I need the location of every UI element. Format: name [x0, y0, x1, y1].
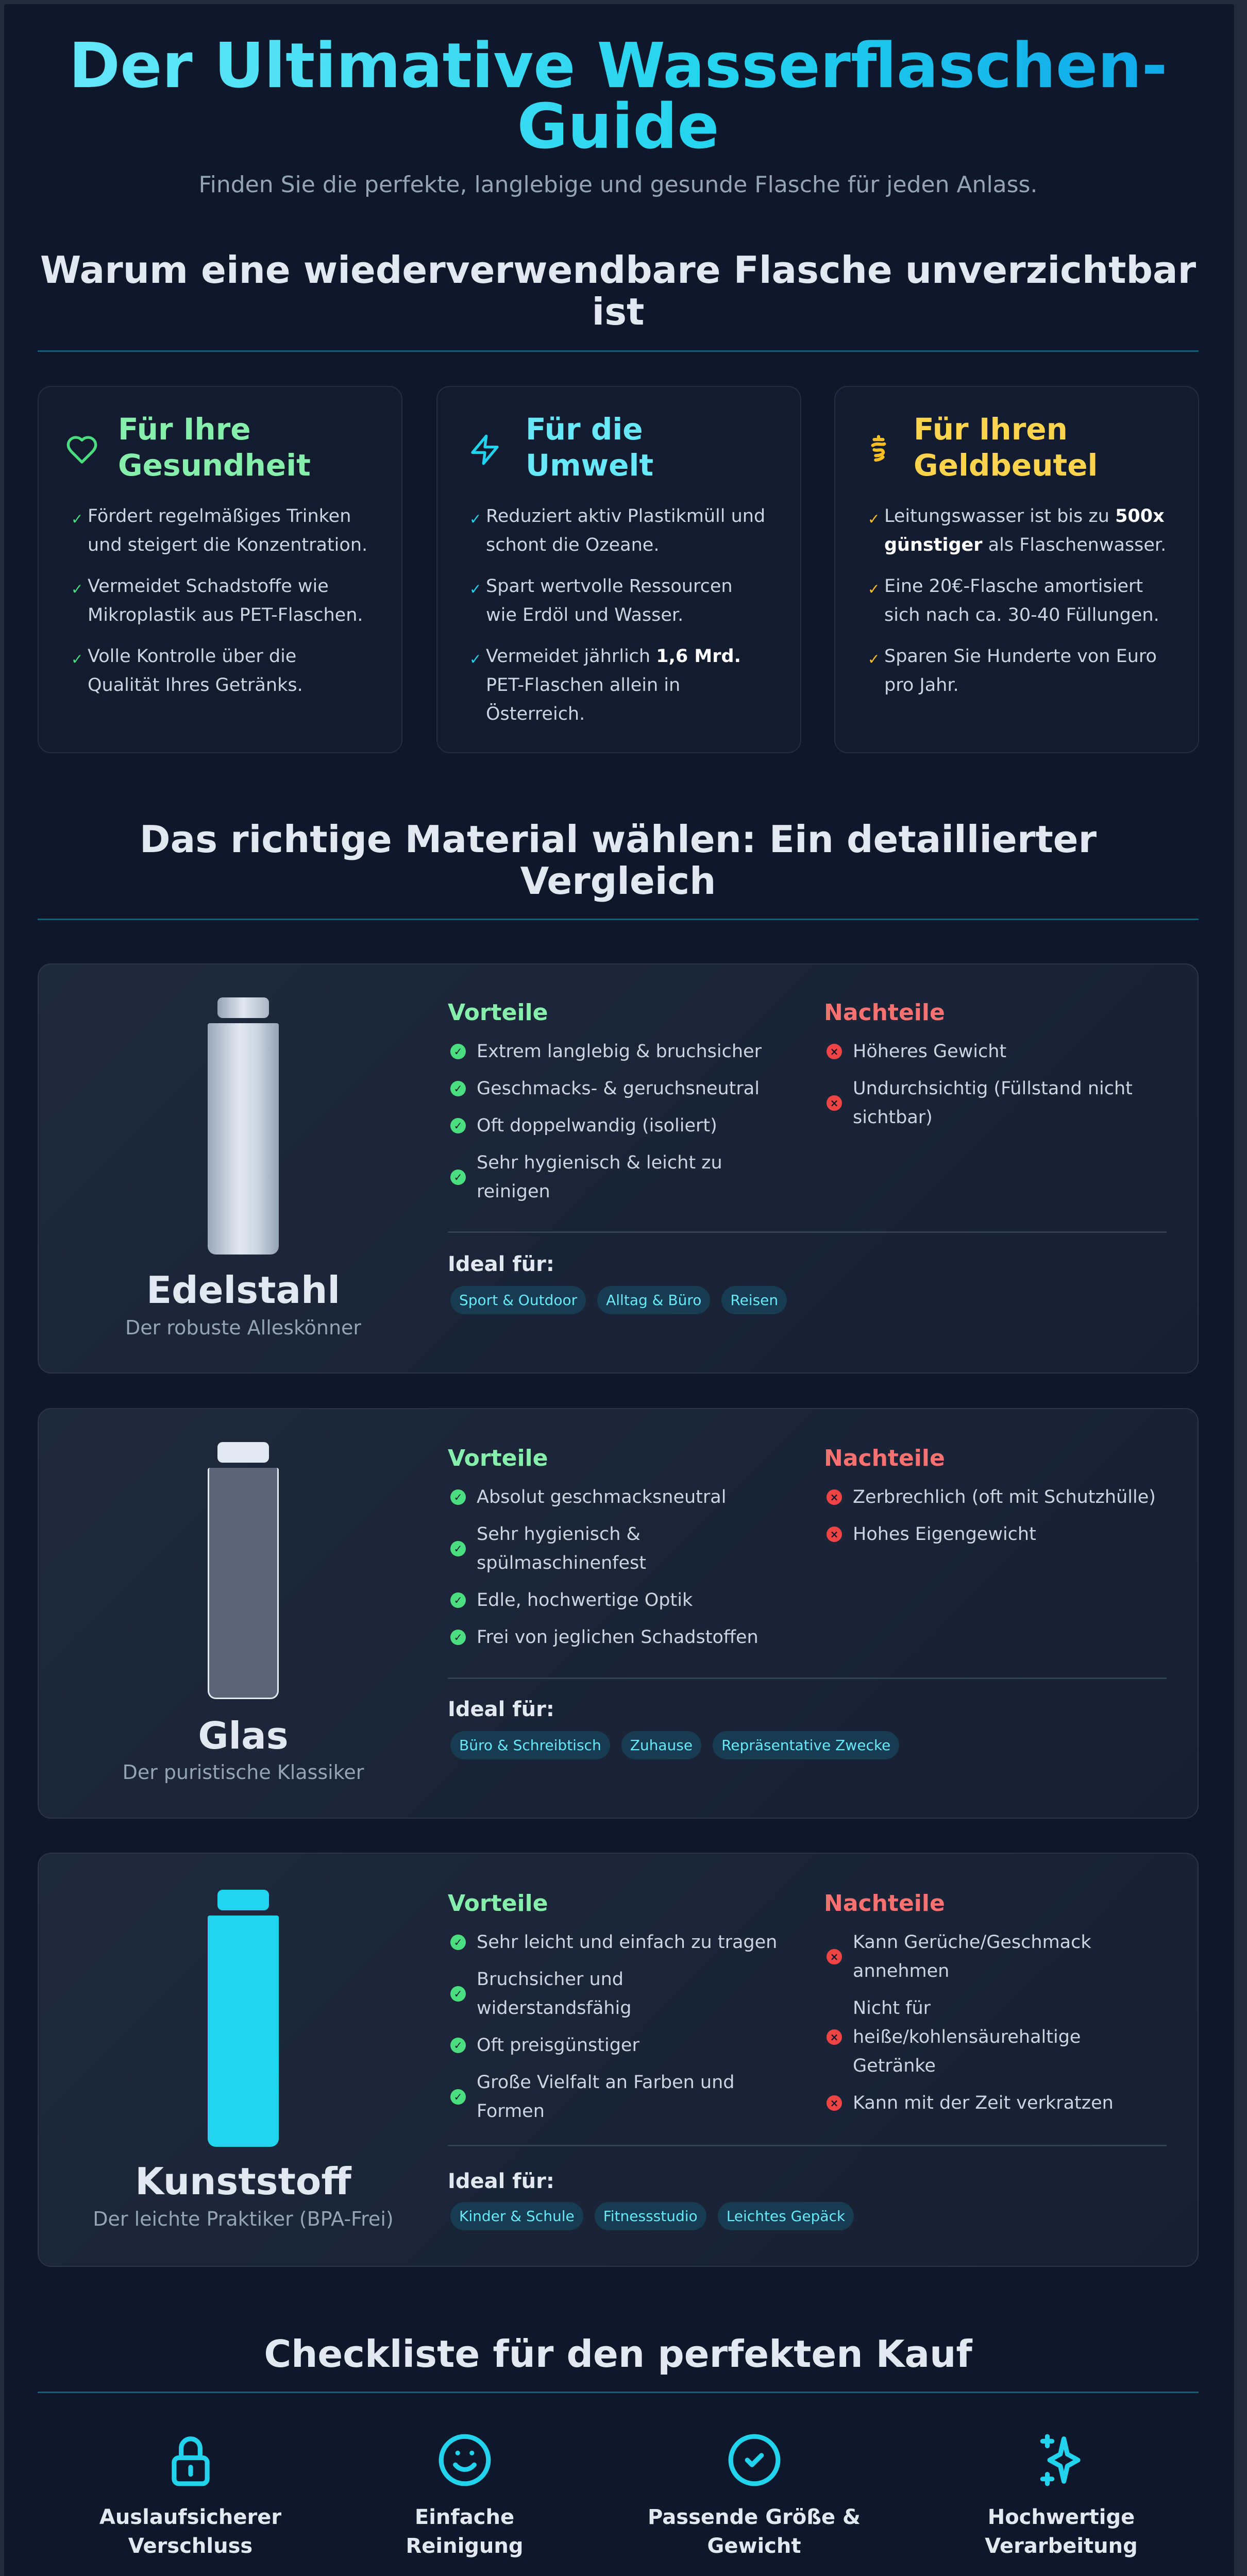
pros: reinigen	[477, 1181, 550, 1202]
list: pro Jahr.	[884, 675, 959, 696]
pros: Extrem langlebig & bruchsicher	[477, 1041, 762, 1062]
checklist item: smile: Einfache	[415, 2505, 514, 2529]
pros: ✓	[454, 1631, 462, 1643]
pros: Vorteile	[448, 1445, 548, 1471]
pros: ✓	[454, 1594, 462, 1606]
list: Eine 20€-Flasche amortisiert	[884, 576, 1143, 597]
pros: ✓	[454, 1988, 462, 2000]
pros: Frei von jeglichen Schadstoffen	[477, 1627, 759, 1648]
tags: Zuhause	[630, 1737, 693, 1754]
cons: Nachteile	[824, 999, 945, 1026]
list: Mikroplastik aus PET-Flaschen.	[88, 605, 363, 625]
pros	[448, 1890, 777, 2122]
subtitle: Finden Sie die perfekte, langlebige und gesunde Flasche für jeden Anlass.	[199, 172, 1037, 198]
pros: Oft preisgünstiger	[477, 2035, 639, 2056]
cons	[824, 1890, 1114, 2113]
checklist item: sparkles	[916, 2432, 1206, 2561]
heading	[118, 412, 311, 483]
panel: environment: ✓	[469, 511, 481, 528]
panel: wallet	[834, 386, 1199, 753]
panel: health	[38, 386, 402, 753]
cons: ×	[830, 1951, 838, 1963]
ideal for: Ideal für:	[448, 2170, 554, 2193]
tags: Repräsentative Zwecke	[721, 1737, 890, 1754]
pros: ✓	[454, 1491, 462, 1503]
pros: ✓	[454, 1936, 462, 1948]
bottle: glass	[123, 1442, 364, 1784]
list: günstiger als Flaschenwasser.	[884, 535, 1166, 555]
cons: Höheres Gewicht	[853, 1041, 1006, 1062]
tagline: Der puristische Klassiker	[123, 1761, 364, 1784]
heading	[526, 412, 653, 483]
list: Österreich.	[486, 704, 585, 724]
panel: environment	[436, 386, 801, 753]
heading: Für die	[526, 412, 643, 447]
pros: Formen	[477, 2101, 545, 2122]
pros: Vorteile	[448, 999, 548, 1026]
list: und steigert die Konzentration.	[88, 535, 367, 555]
cons: ×	[830, 1491, 838, 1503]
panel: wallet: ✓	[868, 651, 880, 668]
cons	[824, 1445, 1156, 1545]
heading: Gesundheit	[118, 448, 311, 483]
heading: material: Das richtige Material wählen: Ein detaillierter	[140, 818, 1097, 861]
heading: Umwelt	[526, 448, 653, 483]
tags: Leichtes Gepäck	[727, 2208, 845, 2225]
heading: material: Vergleich	[520, 859, 716, 903]
heading: Für Ihren	[914, 412, 1068, 447]
cons: annehmen	[853, 1961, 949, 1981]
heading: why reusable	[40, 248, 1196, 333]
panel: Glas	[38, 1408, 1199, 1819]
heading: why reusable: Warum eine wiederverwendbare Flasche unverzichtbar	[40, 248, 1196, 292]
cons: Nachteile	[824, 1445, 945, 1471]
list: Reduziert aktiv Plastikmüll und	[486, 506, 765, 527]
panel: environment: ✓	[469, 581, 481, 598]
cons: ×	[830, 1097, 838, 1109]
list: Spart wertvolle Ressourcen	[486, 576, 733, 597]
heading: why reusable: ist	[592, 290, 644, 333]
cons: ×	[830, 1528, 838, 1540]
icon: heart	[67, 436, 97, 464]
heading: Für Ihre	[118, 412, 251, 447]
cons: ×	[830, 2097, 838, 2109]
cons: Hohes Eigengewicht	[853, 1524, 1036, 1545]
tags	[450, 1731, 899, 1759]
pros: Sehr hygienisch &	[477, 1524, 641, 1545]
icon: money	[871, 435, 886, 462]
cons: Undurchsichtig (Füllstand nicht	[853, 1078, 1133, 1099]
tags	[450, 1286, 787, 1314]
icon: lightning	[471, 435, 499, 465]
cons: Nicht für	[853, 1998, 931, 2019]
list: sich nach ca. 30-40 Füllungen.	[884, 605, 1159, 625]
tags: Kinder & Schule	[459, 2208, 575, 2225]
pros: ✓	[454, 1171, 462, 1183]
checklist item: check circle: Passende Größe &	[648, 2505, 861, 2529]
panel: health: ✓	[71, 581, 83, 598]
cons: Zerbrechlich (oft mit Schutzhülle)	[853, 1487, 1156, 1507]
title: Guide	[517, 91, 719, 163]
list	[868, 506, 1166, 696]
tags: Reisen	[730, 1292, 778, 1309]
pros: Sehr leicht und einfach zu tragen	[477, 1932, 777, 1953]
pros	[448, 999, 762, 1202]
list: Volle Kontrolle über die	[88, 646, 296, 667]
pros: Sehr hygienisch & leicht zu	[477, 1153, 722, 1173]
cons: heiße/kohlensäurehaltige	[853, 2027, 1081, 2047]
cons: ×	[830, 2031, 838, 2043]
checklist item: sparkles: Hochwertige	[988, 2505, 1135, 2529]
list	[469, 506, 765, 724]
checklist item: smile	[319, 2432, 610, 2561]
pros: ✓	[454, 2039, 462, 2052]
panel: health: ✓	[71, 511, 83, 528]
list: Sparen Sie Hunderte von Euro	[884, 646, 1157, 667]
cons: Kann mit der Zeit verkratzen	[853, 2093, 1114, 2113]
tags: Alltag & Büro	[606, 1292, 701, 1309]
pros: Absolut geschmacksneutral	[477, 1487, 726, 1507]
cons: sichtbar)	[853, 1107, 933, 1128]
cons: Kann Gerüche/Geschmack	[853, 1932, 1091, 1953]
pros: ✓	[454, 1120, 462, 1132]
pros: Bruchsicher und	[477, 1969, 624, 1990]
heading: Geldbeutel	[914, 448, 1098, 483]
title	[38, 36, 1199, 158]
ideal for: Ideal für:	[448, 1252, 554, 1276]
list: Leitungswasser ist bis zu 500x	[884, 506, 1165, 527]
bottle: steel	[125, 997, 361, 1339]
tags: Büro & Schreibtisch	[459, 1737, 601, 1754]
pros	[448, 1445, 759, 1648]
panel: Edelstahl	[38, 963, 1199, 1374]
checklist item: sparkles: Verarbeitung	[985, 2534, 1138, 2558]
list: PET-Flaschen allein in	[486, 675, 680, 696]
pros: spülmaschinenfest	[477, 1553, 646, 1573]
list: Vermeidet Schadstoffe wie	[88, 576, 329, 597]
pros: Vorteile	[448, 1890, 548, 1917]
ideal for: Ideal für:	[448, 1698, 554, 1721]
pros: ✓	[454, 1082, 462, 1095]
heading	[914, 412, 1098, 483]
tagline: Der robuste Alleskönner	[125, 1316, 361, 1339]
checklist item: smile: Reinigung	[406, 2534, 524, 2558]
panel: health: ✓	[71, 651, 83, 668]
name: Edelstahl	[146, 1268, 340, 1312]
list: wie Erdöl und Wasser.	[486, 605, 683, 625]
name: Kunststoff	[135, 2160, 351, 2203]
cons	[824, 999, 1133, 1128]
title: Der Ultimative Wasserflaschen-	[69, 30, 1167, 102]
panel: wallet: ✓	[868, 511, 880, 528]
pros: Oft doppelwandig (isoliert)	[477, 1115, 717, 1136]
panel: environment: ✓	[469, 651, 481, 668]
pros: Große Vielfalt an Farben und	[477, 2072, 735, 2093]
list: schont die Ozeane.	[486, 535, 659, 555]
cons: Nachteile	[824, 1890, 945, 1917]
bottle: plastic	[93, 1890, 394, 2230]
list: Fördert regelmäßiges Trinken	[88, 506, 351, 527]
heading: material	[140, 818, 1097, 903]
list	[71, 506, 367, 696]
pros: ✓	[454, 1543, 462, 1555]
cons: ×	[830, 1045, 838, 1058]
checklist item: check circle	[609, 2432, 899, 2561]
pros: ✓	[454, 2091, 462, 2103]
pros: ✓	[454, 1045, 462, 1058]
tagline: Der leichte Praktiker (BPA-Frei)	[93, 2208, 394, 2230]
heading: checklist: Checkliste für den perfekten Kauf	[264, 2332, 972, 2376]
tags: Sport & Outdoor	[459, 1292, 577, 1309]
name: Glas	[198, 1714, 289, 1757]
list: Qualität Ihres Getränks.	[88, 675, 303, 696]
checklist item: check circle: Gewicht	[707, 2534, 801, 2558]
panel: wallet: ✓	[868, 581, 880, 598]
tags	[450, 2202, 854, 2230]
panel: Kunststoff	[38, 1853, 1199, 2267]
list: Vermeidet jährlich 1,6 Mrd.	[486, 646, 741, 667]
checklist item: lock: Auslaufsicherer	[99, 2505, 281, 2529]
pros: widerstandsfähig	[477, 1998, 631, 2019]
checklist item: lock: Verschluss	[128, 2534, 252, 2558]
cons: Getränke	[853, 2056, 936, 2076]
pros: Geschmacks- & geruchsneutral	[477, 1078, 760, 1099]
pros: Edle, hochwertige Optik	[477, 1590, 693, 1611]
tags: Fitnessstudio	[603, 2208, 698, 2225]
checklist item: lock	[45, 2432, 335, 2561]
